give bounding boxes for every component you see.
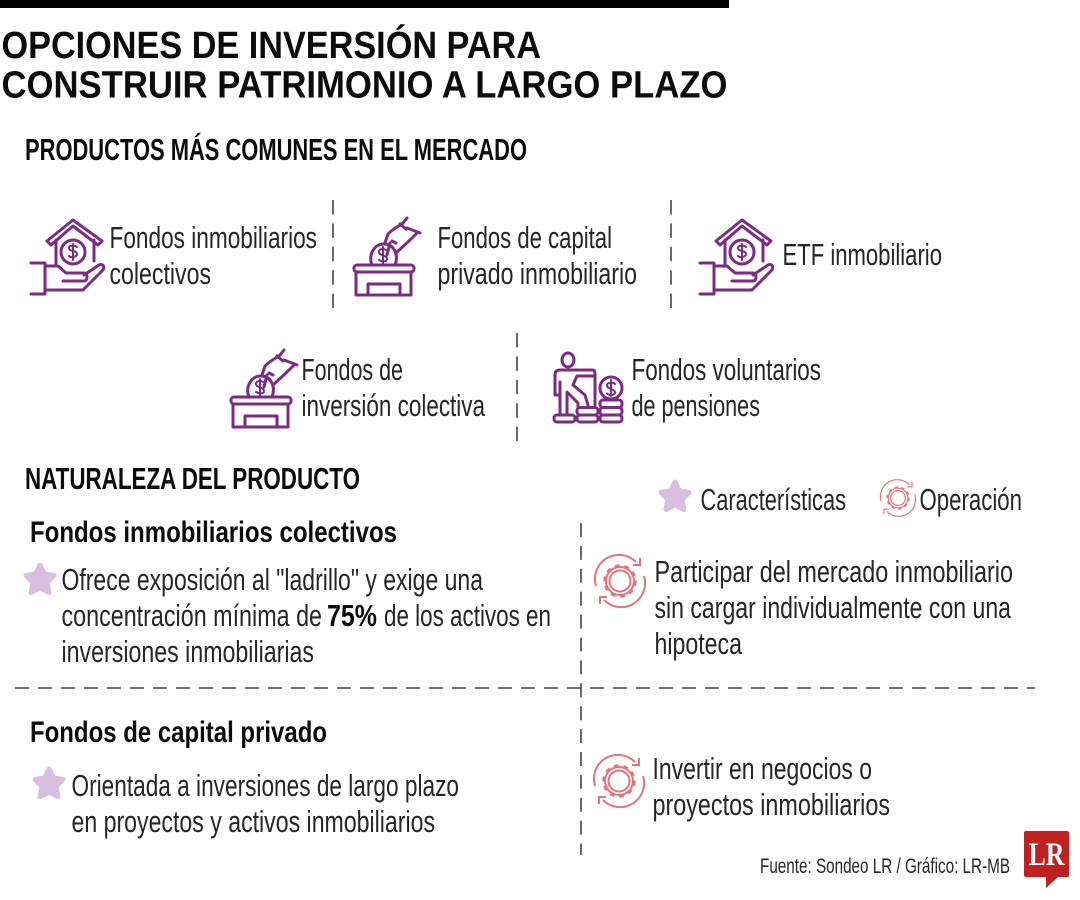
legend label: características: Características — [700, 482, 846, 517]
icon: house in hand — [700, 220, 773, 294]
text: operación — [654, 554, 1013, 661]
logo: LR — [1024, 831, 1069, 888]
text: características: concentración mínima de — [62, 598, 322, 633]
icon: person on coins — [554, 353, 622, 422]
icon: star — [35, 769, 63, 796]
text: operación — [652, 751, 890, 822]
label — [438, 220, 637, 291]
label: de pensiones — [632, 388, 760, 423]
label: Fondos de — [302, 352, 403, 387]
text: características: 75% — [327, 598, 377, 633]
panel: fondos de inversión colectiva — [231, 350, 486, 427]
text: características: Orientada a inversiones de largo plazo — [72, 768, 459, 803]
legend label: operación: Operación — [920, 482, 1022, 517]
panel: ETF inmobiliario — [700, 220, 942, 294]
text: características — [72, 768, 459, 839]
text: características: Ofrece exposición al "ladrillo" y exige una — [62, 562, 484, 597]
title: CONSTRUIR PATRIMONIO A LARGO PLAZO — [2, 64, 728, 106]
label — [632, 352, 821, 423]
label — [302, 352, 486, 423]
text: operación: proyectos inmobiliarios — [652, 787, 890, 822]
panel: fondos inmobiliarios colectivos detail — [26, 516, 1013, 669]
text: características: en proyectos y activos inmobiliarios — [72, 804, 435, 839]
label: Fondos inmobiliarios — [110, 220, 317, 255]
icon: gear — [595, 555, 645, 607]
icon: gear — [594, 755, 644, 807]
panel: fondos de capital privado detail — [30, 716, 890, 839]
label: Fondos de capital — [438, 220, 612, 255]
label: colectivos — [110, 256, 211, 291]
top bar — [0, 0, 729, 8]
logo: LR: LR — [1028, 837, 1065, 873]
text: características: inversiones inmobiliarias — [62, 634, 314, 669]
icon: coin into box — [354, 218, 420, 295]
icon: star — [26, 565, 54, 592]
label: Fondos voluntarios — [632, 352, 821, 387]
text: operación: Invertir en negocios o — [652, 751, 872, 786]
subheading: Fondos inmobiliarios colectivos — [30, 516, 397, 549]
subheading: Fondos de capital privado — [30, 716, 327, 749]
panel: fondos inmobiliarios colectivos — [31, 220, 317, 294]
text: características: de los activos en — [384, 598, 551, 633]
icon: star — [661, 482, 689, 510]
icon: gear — [880, 480, 916, 516]
heading: naturaleza del producto: NATURALEZA DEL PRODUCTO — [25, 461, 360, 496]
label: privado inmobiliario — [438, 256, 637, 291]
title — [2, 23, 728, 106]
legend — [661, 480, 1022, 517]
label: ETF inmobiliario — [782, 237, 942, 272]
label — [110, 220, 317, 291]
heading: productos más comunes: PRODUCTOS MÁS COMUNES EN EL MERCADO — [25, 132, 527, 167]
icon: coin into box — [231, 350, 297, 427]
title: OPCIONES DE INVERSIÓN PARA — [2, 23, 541, 67]
label: inversión colectiva — [302, 388, 486, 423]
icon: house in hand — [31, 220, 104, 294]
panel: fondos de capital privado inmobiliario — [354, 218, 637, 295]
panel: fondos voluntarios de pensiones — [554, 352, 821, 423]
text: características — [62, 562, 551, 669]
text: operación: hipoteca — [654, 626, 743, 661]
